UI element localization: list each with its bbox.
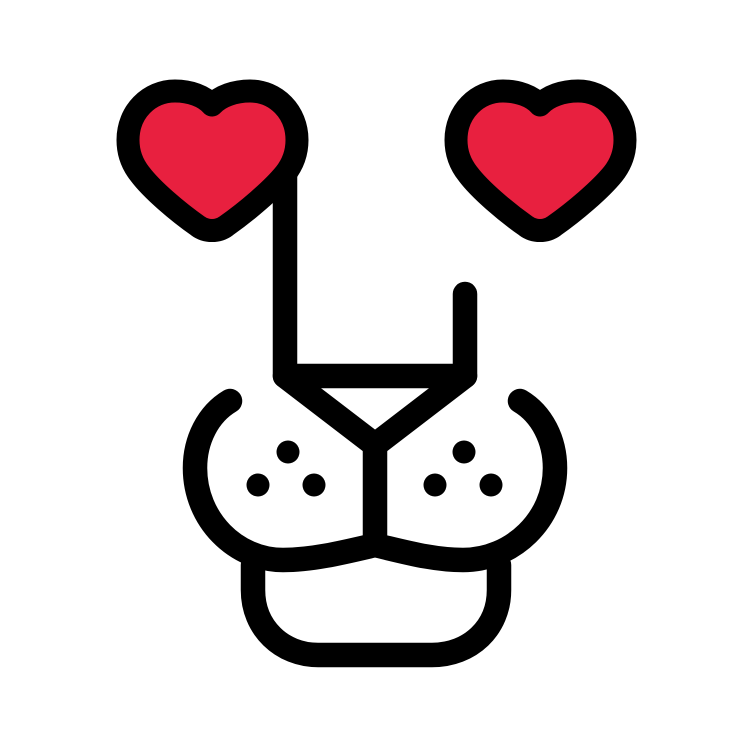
right muzzle	[375, 401, 555, 560]
chin	[253, 565, 499, 655]
left muzzle	[195, 401, 375, 560]
nose bridge and nose	[285, 165, 465, 545]
icon: left heart eye	[128, 91, 297, 230]
icon: right heart eye	[456, 91, 625, 230]
right whisker dots	[424, 440, 502, 496]
left whisker dots	[246, 440, 326, 496]
